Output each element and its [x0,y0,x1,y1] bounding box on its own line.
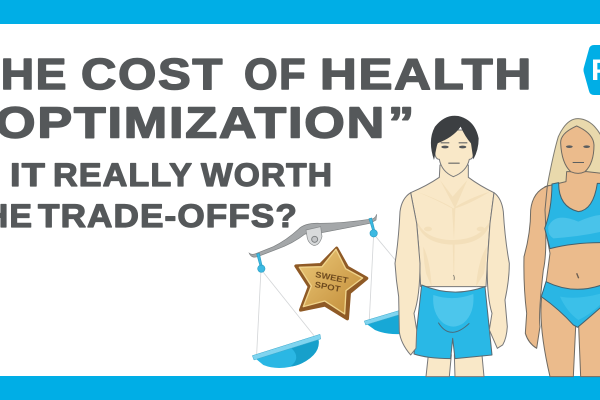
subtitle line 1: WORTH [201,157,333,193]
subtitle line 1: IT [10,157,46,193]
title line 1: COST [81,50,224,99]
female face [561,126,594,173]
title [0,50,533,234]
female back hair [547,119,600,187]
bottom banner [0,376,600,400]
star label: SWEET [315,269,349,285]
title line 2: ” [388,98,416,148]
female torso [542,172,600,297]
title line 1: OF [244,50,307,99]
male eyes and mouth [441,142,467,164]
female arm [524,186,547,348]
male figure [395,116,509,377]
title line 2: OPTIMIZATION [0,98,386,148]
title line 1 [0,50,533,99]
male muscle shading [416,180,491,287]
subtitle line 2: TRADE-OFFS? [38,198,298,234]
scale beam [249,214,377,257]
female legs [541,293,600,377]
male torso [411,165,494,287]
logo badge [584,45,600,95]
strings [257,234,397,354]
male legs [426,355,484,377]
male navel [453,275,454,280]
male hair [431,116,479,160]
hooks and rings [257,218,377,272]
right pan [364,310,402,334]
female navel [577,273,579,278]
subtitle line 1: REALLY [53,157,193,193]
star badge [296,248,367,319]
female figure [524,119,600,377]
balance scale [249,214,402,368]
left pan [252,334,321,368]
subtitle line 1 [0,157,333,193]
male right arm [487,193,509,348]
star label: SPOT [314,279,341,294]
star label [313,269,349,295]
female bikini [541,282,600,327]
top banner [0,0,600,24]
female top [545,183,600,249]
male head [431,116,479,177]
title line 1: HEALTH [320,50,533,99]
male left arm [395,193,420,355]
male shorts [414,285,492,359]
